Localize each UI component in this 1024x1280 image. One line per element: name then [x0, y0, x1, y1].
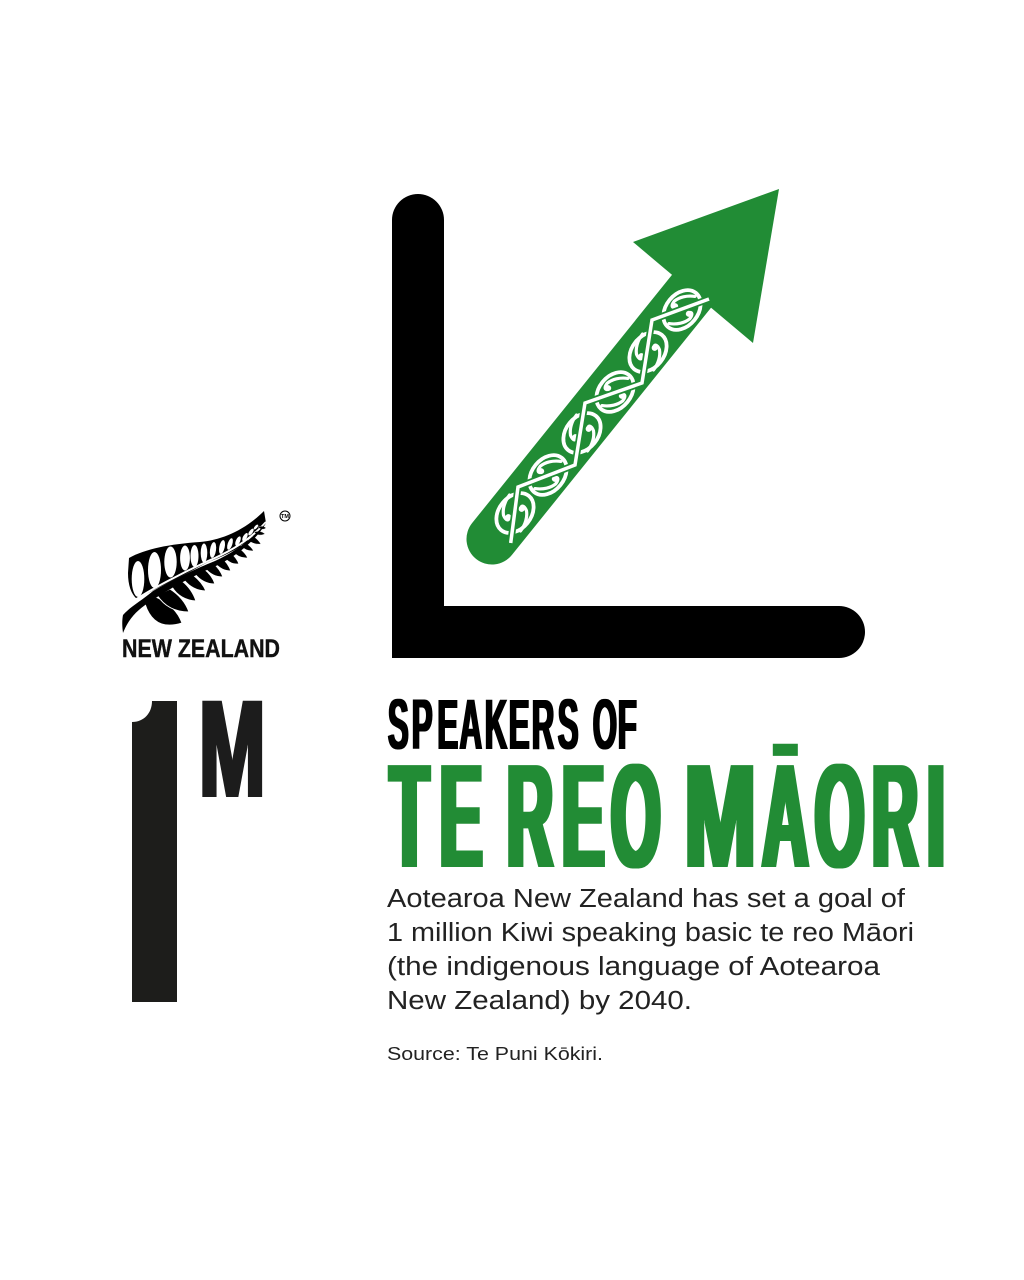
body text: New Zealand) by 2040.: [387, 987, 692, 1015]
heading: te reo maori: [390, 732, 945, 899]
icon: fern upper frond: [128, 511, 266, 600]
logo wordmark: NEW ZEALAND: [122, 636, 280, 663]
icon: fern stem: [122, 523, 266, 633]
chart axes: [418, 220, 839, 632]
icon: fern lower leaves: [145, 526, 266, 625]
big figure: 1M: [132, 700, 262, 1002]
body text: [387, 885, 914, 1015]
heading: te reo maori: ĀORI: [762, 734, 945, 899]
icon: trademark symbol: [280, 511, 290, 521]
heading: te reo maori: M: [684, 732, 756, 899]
body text: 1 million Kiwi speaking basic te reo Māori: [387, 919, 914, 947]
body text: Aotearoa New Zealand has set a goal of: [387, 885, 906, 913]
unit M: M: [199, 672, 265, 828]
arrow shaft: [492, 282, 699, 539]
icon: trademark symbol: TM: [281, 514, 289, 520]
icon: upward green arrow with koru pattern: [486, 189, 779, 543]
source note: Source: Te Puni Kōkiri.: [387, 1043, 603, 1064]
logo: silver fern New Zealand: [122, 511, 290, 663]
arrow head: [633, 189, 779, 343]
body text: (the indigenous language of Aotearoa: [387, 953, 881, 981]
heading: speakers of: SPEAKERS OF: [388, 684, 637, 765]
numeral 1: 1: [28, 605, 273, 1096]
infographic canvas: [122, 189, 944, 1060]
koru pattern: [486, 277, 716, 543]
heading: te reo maori: TE REO: [390, 734, 661, 899]
